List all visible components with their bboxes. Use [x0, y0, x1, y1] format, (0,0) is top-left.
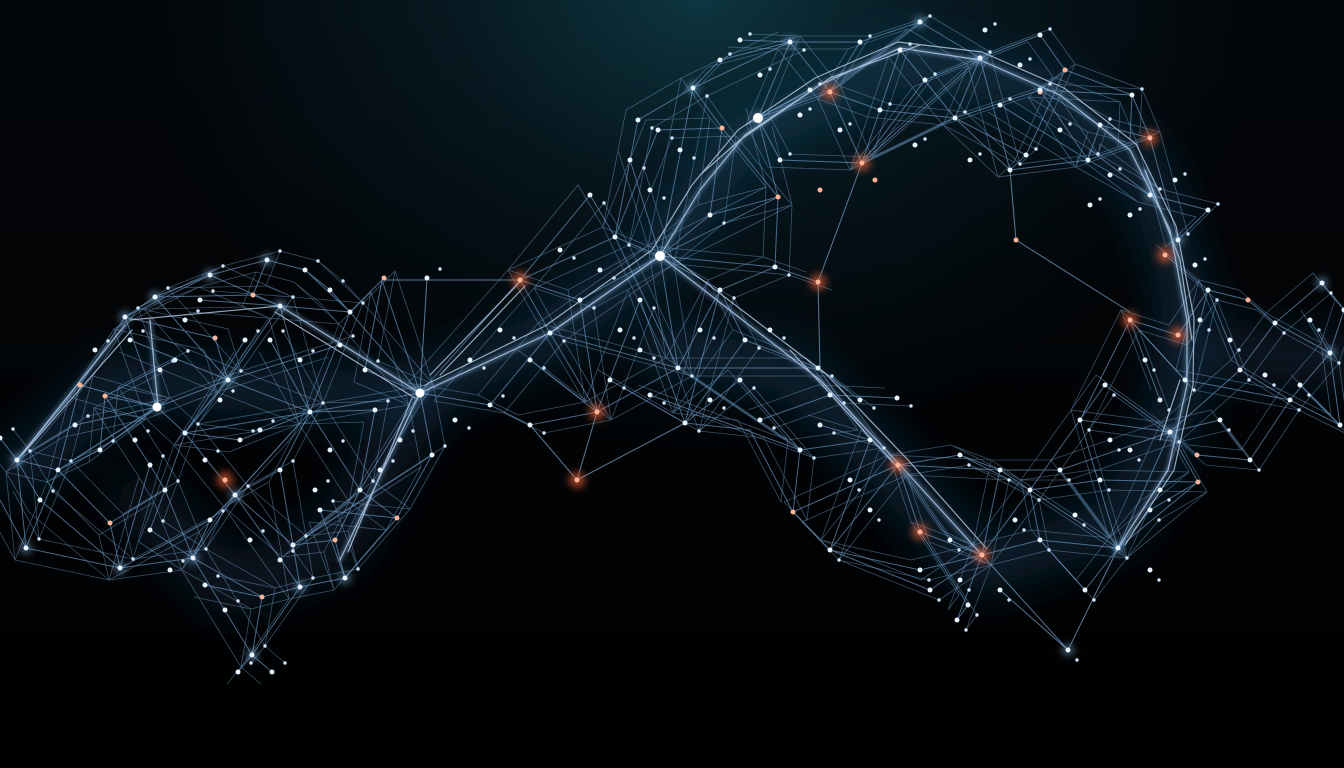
white nodes: lower ring and right tail: [830, 283, 1344, 650]
bright strands: [17, 42, 1194, 560]
thin links: lower ring and right tail: [793, 255, 1344, 620]
thin links: left cluster: [0, 260, 432, 672]
ambient glow behind the network band: [20, 60, 1340, 590]
white nodes: upper ring: [720, 22, 1208, 265]
warm glowing nodes: [80, 70, 1248, 597]
thin links: upper ring: [693, 22, 1208, 240]
white nodes: centre section: [455, 42, 897, 450]
thin links: centre section: [420, 42, 897, 512]
white nodes: left cluster: [0, 260, 490, 672]
long sparse links crossing the ring and the lower gap: [382, 163, 1130, 650]
